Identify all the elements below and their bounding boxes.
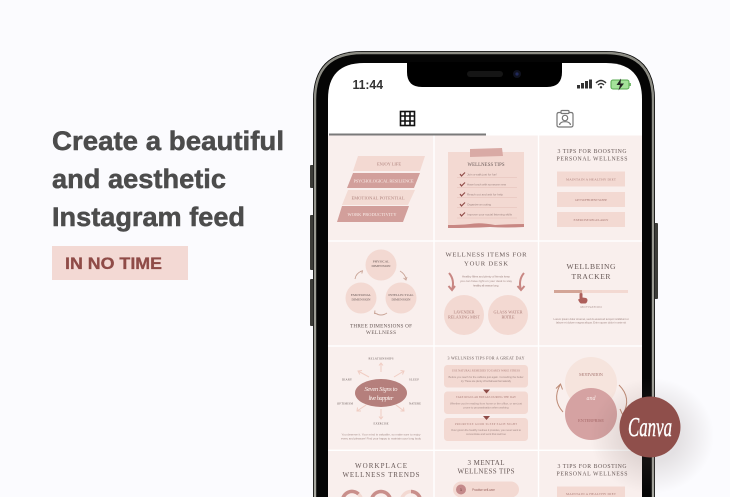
tile: motivation and enterprise <box>556 357 627 440</box>
tile: three dimensions of wellness: DIMENSION <box>391 298 411 302</box>
tile: seven signs to live happier: live happier <box>368 395 394 402</box>
tile: parallelogram list <box>337 156 425 222</box>
badge: in no time: IN NO TIME <box>65 254 162 273</box>
tile: parallelogram list: PSYCHOLOGICAL RESILIENCE <box>354 178 414 184</box>
tile: workplace wellness trends: WELLNESS TRENDS <box>342 471 420 479</box>
tile: 3 tips for boosting repeat: MAINTAIN A HEALTHY DIET <box>566 492 617 496</box>
tile: three dimensions of wellness: PHYSICAL <box>373 260 389 264</box>
tile: workplace wellness trends: WORKPLACE <box>355 462 407 470</box>
badge: in no time <box>52 246 188 280</box>
status icons <box>577 78 631 90</box>
tab: tagged icon <box>557 110 573 127</box>
tile: wellness items for your desk: Healthy fillers and plenty of friends keep <box>462 274 510 278</box>
tile: motivation and enterprise: ENTERPRISE <box>578 418 604 423</box>
phone body <box>313 51 655 497</box>
tile: wellness tips for a great day: prone to procrastination when working <box>464 406 509 410</box>
tile: parallelogram list: EMOTIONAL POTENTIAL <box>352 196 405 200</box>
tile: 3 tips for boosting <box>556 149 628 227</box>
tile: 3 tips for boosting repeat: 3 TIPS FOR BOOSTING <box>558 464 626 470</box>
tile: seven signs to live happier: You deserve it. Your mind is valuable, so make sure to enjoy <box>342 432 421 436</box>
tile: seven signs to live happier: SLEEP <box>409 378 419 382</box>
tile: wellness tips note: Join a walk just for fun! <box>467 172 497 176</box>
tile: wellness tips for a great day: Before you reach for the caffeine just again. Consulting the better <box>448 375 524 379</box>
tile: 3 mental wellness tips: Practise self-care <box>472 488 495 492</box>
phone side buttons <box>310 165 658 326</box>
tile: 3 tips for boosting: MAINTAIN A HEALTHY DIET <box>566 178 617 182</box>
headline: Instagram feed <box>52 202 245 232</box>
tile: wellness items for your desk <box>444 252 528 335</box>
tile: wellness items for your desk: GLASS WATER <box>494 310 523 314</box>
phone <box>310 51 658 497</box>
tile: wellness tips for a great day <box>444 356 528 441</box>
tile: wellness tips for a great day: Whether you're reading from home or the office, or are just <box>450 402 522 406</box>
tile: wellbeing tracker <box>554 262 629 324</box>
tile: three dimensions of wellness: EMOTIONAL <box>351 293 371 297</box>
screen <box>328 63 642 497</box>
tile: wellness items for your desk: RELAXING MIST <box>448 314 480 320</box>
tile: seven signs to live happier <box>337 356 422 440</box>
tile: wellness items for your desk: BOTTLE <box>502 314 515 320</box>
tile: three dimensions of wellness: INTELLECTUAL <box>388 293 414 297</box>
status time: 11:44 <box>352 77 384 92</box>
tile: wellness tips note: Have lunch with someone new <box>467 182 507 186</box>
canva badge: Canva <box>628 412 672 442</box>
tile: wellness tips for a great day: USE NATURAL REMEDIES TO EARLY WAKE STRESS <box>452 370 520 372</box>
tile: 3 mental wellness tips: 1 <box>460 487 463 492</box>
tab underline <box>329 134 486 136</box>
tile: three dimensions of wellness <box>346 250 416 336</box>
tile: seven signs to live happier: EXERCISE <box>374 422 389 426</box>
tile: wellbeing tracker: WELLBEING <box>566 262 616 271</box>
tile: three dimensions of wellness: THREE DIMENSIONS OF <box>350 324 412 330</box>
tile: wellbeing tracker: TRACKER <box>572 272 611 281</box>
headline: Create a beautiful <box>52 126 284 156</box>
tile: wellness items for your desk: WELLNESS ITEMS FOR <box>446 252 527 258</box>
feed grid <box>328 136 642 497</box>
tile: wellness tips for a great day: PRIORITIZE GOOD SLEEP EACH NIGHT <box>455 423 517 426</box>
tile: three dimensions of wellness: WELLNESS <box>366 330 396 336</box>
tile: seven signs to live happier: DIARY <box>342 378 353 382</box>
tile: wellness tips note: WELLNESS TIPS <box>468 163 505 168</box>
tile: wellness tips for a great day: 3 WELLNESS TIPS FOR A GREAT DAY <box>448 356 525 360</box>
tile: three dimensions of wellness: DIMENSION <box>371 264 391 268</box>
tile: parallelogram list: WORK PRODUCTIVITY <box>348 212 397 217</box>
tile: motivation and enterprise: and <box>586 396 596 402</box>
tile: wellness tips note: Improve your social listening skills <box>467 212 512 216</box>
tile: wellness tips for a great day: TAKE REGULAR BREAKS DURING THE DAY <box>456 396 516 399</box>
tile: 3 tips for boosting: 3 TIPS FOR BOOSTING <box>558 149 626 155</box>
notch <box>407 62 562 87</box>
tile: wellness tips note: Organize an outing <box>467 202 491 206</box>
canva badge <box>620 396 680 458</box>
tile: seven signs to live happier: Seven Signs to <box>364 386 398 393</box>
tile: wellness tips for a great day: Over grown the healthy routines it provides, you never want to <box>451 428 521 432</box>
tile: seven signs to live happier: RELATIONSHIPS <box>368 356 394 360</box>
tile: wellness items for your desk: YOUR DESK <box>464 260 508 268</box>
tile: 3 tips for boosting: GET SUFFICIENT SLEEP <box>575 198 607 202</box>
tab: grid icon <box>400 112 414 126</box>
tile: seven signs to live happier: OPTIMISM <box>337 402 353 406</box>
tile: wellness tips for a great day: try. These are plenty of herbal teas that naturally <box>461 379 512 383</box>
tile: wellbeing tracker: MOTIVATION <box>580 305 602 309</box>
tile: 3 tips for boosting repeat: PERSONAL WELLNESS <box>556 472 628 478</box>
tile: workplace wellness trends <box>342 462 420 497</box>
tile: 3 tips for boosting: PERSONAL WELLNESS <box>556 156 628 162</box>
canva badge shadow <box>590 378 714 494</box>
tile: 3 mental wellness tips: WELLNESS TIPS <box>458 468 515 476</box>
tile: wellness tips note <box>448 148 524 228</box>
tile: wellness tips for a great day: concentrate and work that well too <box>466 432 506 436</box>
tile: 3 tips for boosting repeat <box>556 464 628 497</box>
tile: seven signs to live happier: NATURE <box>409 402 421 406</box>
tile: wellness tips note: Reach out and ask for help <box>467 192 503 196</box>
tile: wellness items for your desk: LAVENDER <box>454 310 475 314</box>
tile: wellbeing tracker: Lorem ipsum dolor sit amet, sed do eiusmod tempor incididunt ut <box>554 317 629 321</box>
tile: 3 tips for boosting: EXERCISE REGULARLY <box>574 218 609 222</box>
headline <box>52 126 284 232</box>
tile: three dimensions of wellness: DIMENSION <box>351 298 371 302</box>
tile: wellness items for your desk: healthy all season long. <box>473 284 499 288</box>
tile: 3 mental wellness tips <box>453 459 519 497</box>
headline: and aesthetic <box>52 164 226 194</box>
tile: 3 mental wellness tips: 3 MENTAL <box>468 459 504 467</box>
tile: parallelogram list: ENJOY LIFE <box>377 162 401 166</box>
tile: wellness items for your desk: you can have right on your desk to stay <box>460 279 512 283</box>
tile: motivation and enterprise: MOTIVATION <box>579 372 604 377</box>
tile: seven signs to live happier: every and pleasure! Find your happy to maintain your long body <box>341 436 422 440</box>
tile: wellbeing tracker: labore et dolore magna aliqua. Enim quam dolor in ante sit <box>556 320 626 324</box>
